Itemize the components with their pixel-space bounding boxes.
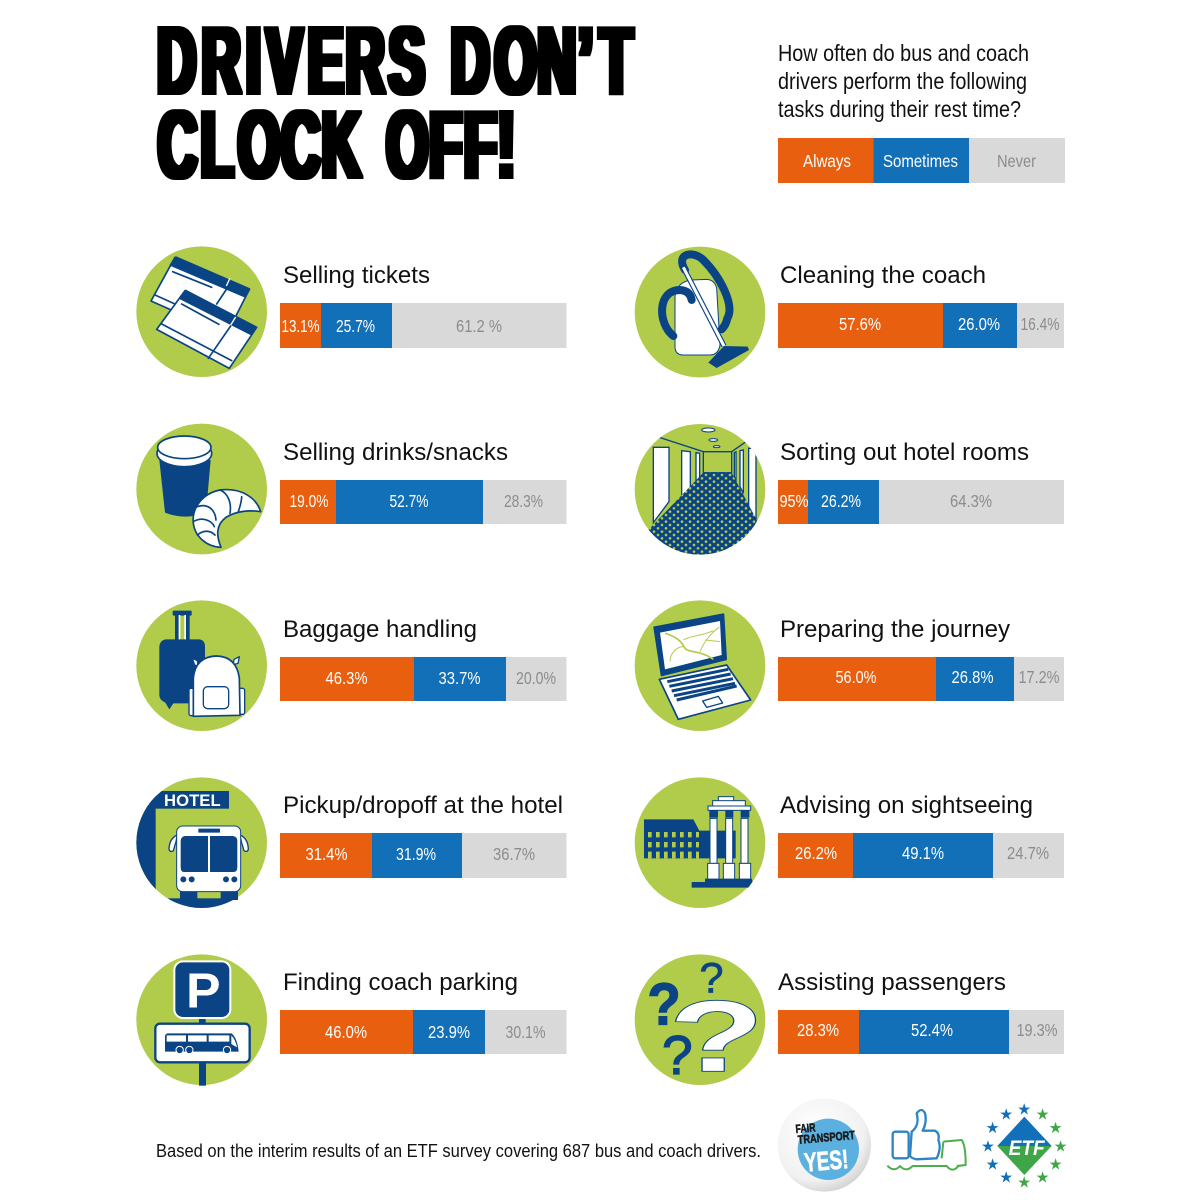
logo: ETF stars and diamond: ★	[986, 1120, 1000, 1137]
logo: ETF stars and diamond: ★	[1054, 1138, 1068, 1155]
stacked bar: 36.7%	[493, 844, 535, 864]
stacked bar: 20.0%	[516, 668, 556, 688]
logo: Fair Transport badge	[778, 1098, 871, 1192]
stacked bar: 49.1%	[902, 843, 944, 863]
icon: tickets	[136, 246, 267, 377]
title: CLOCK OFF!	[158, 92, 515, 198]
question text: How often do bus and coach	[778, 40, 1029, 66]
question text: drivers perform the following	[778, 68, 1027, 94]
question text	[778, 40, 1029, 122]
stacked bar: 28.3%	[797, 1020, 839, 1040]
logo: ETF stars and diamond: ★	[999, 1107, 1013, 1124]
stacked bar	[280, 480, 566, 524]
icon: hotel corridor	[633, 424, 767, 560]
heading: Assisting passengers	[778, 969, 1006, 996]
icon: parking sign: P	[186, 963, 221, 1018]
logo: ETF stars and diamond: ★	[1036, 1170, 1050, 1187]
legend	[778, 138, 1065, 183]
stacked bar: 52.7%	[390, 491, 428, 511]
stacked bar: 52.4%	[911, 1020, 953, 1040]
logo: ETF stars and diamond: ETF	[1009, 1136, 1046, 1160]
stacked bar: 46.3%	[326, 668, 368, 688]
icon: question marks: ?	[699, 955, 724, 1002]
icon: Roman monuments	[635, 777, 765, 908]
logo: ETF stars and diamond: ★	[1049, 1156, 1063, 1173]
stacked bar: 17.2%	[1018, 667, 1060, 687]
heading: Selling drinks/snacks	[283, 439, 508, 466]
panel: preparing the journey	[635, 600, 1064, 731]
stacked bar	[280, 303, 566, 348]
stacked bar: 95%	[780, 491, 808, 511]
icon: vacuum cleaner	[635, 247, 765, 377]
stacked bar: 31.4%	[306, 844, 348, 864]
stacked bar: 61.2 %	[456, 316, 502, 336]
icon: question marks	[635, 954, 765, 1094]
stacked bar: 24.7%	[1007, 843, 1049, 863]
heading: Cleaning the coach	[780, 262, 986, 289]
heading: Finding coach parking	[283, 969, 518, 996]
stacked bar: 57.6%	[839, 314, 881, 334]
logo: ETF stars and diamond: ★	[986, 1156, 1000, 1173]
panel: pickup at hotel	[133, 775, 567, 915]
panel: finding parking	[136, 954, 566, 1086]
panel: selling drinks	[136, 424, 566, 554]
legend: Sometimes	[883, 151, 958, 171]
heading: Selling tickets	[283, 262, 430, 289]
logo: Fair Transport badge: FAIR	[795, 1120, 816, 1136]
logo: thumbs-up truck	[887, 1110, 966, 1170]
logo: ETF stars and diamond: ★	[1017, 1175, 1031, 1192]
stacked bar: 28.3%	[504, 491, 543, 511]
question text: tasks during their rest time?	[778, 96, 1021, 122]
stacked bar	[778, 1010, 1064, 1054]
icon: laptop with map	[635, 600, 765, 731]
panel: selling tickets	[136, 246, 566, 377]
panel: baggage handling	[136, 600, 566, 731]
stacked bar	[778, 480, 1064, 524]
stacked bar: 13.1%	[282, 316, 320, 336]
heading: Pickup/dropoff at the hotel	[283, 792, 563, 819]
footer note: Based on the interim results of an ETF survey covering 687 bus and coach drivers.	[156, 1141, 761, 1161]
logo: ETF stars and diamond: ★	[1017, 1102, 1031, 1119]
stacked bar: 30.1%	[506, 1022, 546, 1042]
logos	[778, 1098, 1068, 1192]
icon: suitcase and backpack	[136, 600, 267, 731]
stacked bar: 23.9%	[428, 1022, 470, 1042]
panel: assisting passengers	[635, 954, 1064, 1094]
logo: ETF stars and diamond: ★	[1036, 1107, 1050, 1124]
logo: Fair Transport badge: TRANSPORT	[797, 1128, 856, 1147]
logo: ETF stars and diamond	[981, 1102, 1068, 1192]
stacked bar: 31.9%	[396, 844, 436, 864]
stacked bar: 26.8%	[952, 667, 994, 687]
logo: ETF stars and diamond: ★	[981, 1138, 995, 1155]
icon: coffee and croissant	[136, 424, 267, 554]
title: DRIVERS DON’T	[157, 8, 633, 114]
icon: question marks: ?	[662, 1024, 693, 1086]
stacked bar: 19.3%	[1016, 1020, 1058, 1040]
logo: ETF stars and diamond: ★	[1049, 1120, 1063, 1137]
stacked bar: 19.0%	[290, 491, 328, 511]
stacked bar: 64.3%	[950, 491, 992, 511]
panel: cleaning the coach	[635, 247, 1064, 377]
stacked bar: 33.7%	[438, 668, 480, 688]
title	[157, 8, 633, 198]
stacked bar: 25.7%	[336, 316, 375, 336]
heading: Advising on sightseeing	[780, 792, 1033, 819]
icon: question marks: ?	[668, 980, 765, 1094]
icon: parking sign	[136, 954, 267, 1086]
icon: hotel and bus: HOTEL	[164, 791, 221, 810]
icon: hotel and bus	[136, 777, 267, 908]
stacked bar	[280, 657, 566, 701]
stacked bar: 56.0%	[836, 667, 876, 687]
stacked bar: 26.2%	[821, 491, 861, 511]
panel: advising on sightseeing	[635, 777, 1064, 908]
stacked bar	[778, 657, 1064, 701]
panel: sorting hotel rooms	[633, 424, 1064, 560]
stacked bar	[778, 833, 1064, 878]
stacked bar	[280, 833, 566, 878]
stacked bar: 26.2%	[795, 843, 837, 863]
heading: Sorting out hotel rooms	[780, 439, 1029, 466]
stacked bar: 16.4%	[1020, 314, 1060, 334]
logo: ETF stars and diamond: ★	[999, 1170, 1013, 1187]
icon: question marks: ?	[647, 972, 681, 1038]
legend: Always	[803, 151, 851, 171]
legend: Never	[997, 151, 1036, 171]
stacked bar	[778, 303, 1064, 348]
logo: Fair Transport badge: YES!	[803, 1144, 850, 1178]
heading: Baggage handling	[283, 616, 477, 643]
stacked bar: 46.0%	[325, 1022, 367, 1042]
stacked bar	[280, 1010, 566, 1054]
stacked bar: 26.0%	[958, 314, 1000, 334]
heading: Preparing the journey	[780, 616, 1010, 643]
